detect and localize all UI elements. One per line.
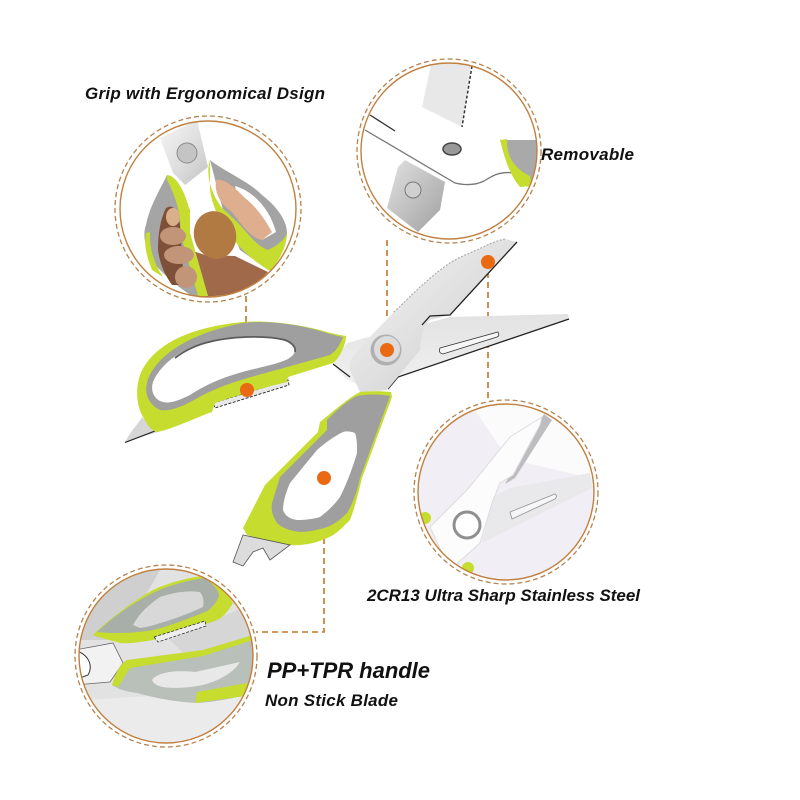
plate background bbox=[476, 405, 592, 478]
walnut bbox=[194, 211, 236, 259]
upper handle bbox=[137, 322, 346, 432]
green edges bbox=[421, 512, 431, 524]
lower handle bbox=[112, 638, 253, 703]
palm bbox=[196, 252, 268, 296]
circle: stainless steel detail bbox=[414, 395, 600, 584]
main scissors bbox=[125, 239, 569, 566]
hole bbox=[283, 431, 357, 520]
circle: removable detail bbox=[357, 59, 541, 243]
serration bbox=[154, 621, 206, 642]
long lower blade bbox=[333, 314, 569, 395]
circle: handle detail bbox=[70, 565, 260, 750]
pivot bolt bbox=[370, 334, 402, 366]
label: grip: Grip with Ergonomical Dsign bbox=[85, 84, 325, 103]
lower left blade tip bbox=[125, 417, 158, 442]
serrated strip on upper handle bbox=[213, 380, 289, 408]
right handle bbox=[210, 160, 287, 271]
handle end bbox=[500, 140, 540, 187]
left handle bbox=[144, 175, 208, 296]
label: blade: Non Stick Blade bbox=[265, 691, 398, 710]
serrated blade bbox=[422, 60, 472, 127]
blades and pivot bbox=[160, 120, 208, 185]
serrated spine bbox=[505, 414, 552, 484]
label: handle: PP+TPR handle bbox=[267, 658, 430, 683]
hole bbox=[152, 337, 295, 403]
left blades bbox=[75, 643, 123, 685]
serrated upper blade bbox=[349, 239, 517, 392]
serrated blade bbox=[430, 417, 542, 570]
second blade bbox=[482, 473, 592, 543]
bottle opener tip bbox=[233, 535, 290, 566]
label: removable: Removable bbox=[541, 145, 634, 164]
keyhole bbox=[443, 143, 461, 155]
lower separated blade bbox=[387, 160, 445, 232]
connector lines bbox=[246, 240, 488, 632]
plate edge bbox=[365, 130, 513, 184]
orange dots bbox=[240, 255, 495, 485]
rivet bbox=[405, 182, 421, 198]
thumb bbox=[216, 180, 272, 240]
lower handle bbox=[243, 391, 392, 545]
circle: grip detail bbox=[115, 116, 301, 302]
pivot bbox=[454, 512, 480, 538]
fingers bbox=[158, 206, 183, 285]
upper handle bbox=[93, 575, 233, 643]
label: steel: 2CR13 Ultra Sharp Stainless Steel bbox=[366, 586, 641, 605]
